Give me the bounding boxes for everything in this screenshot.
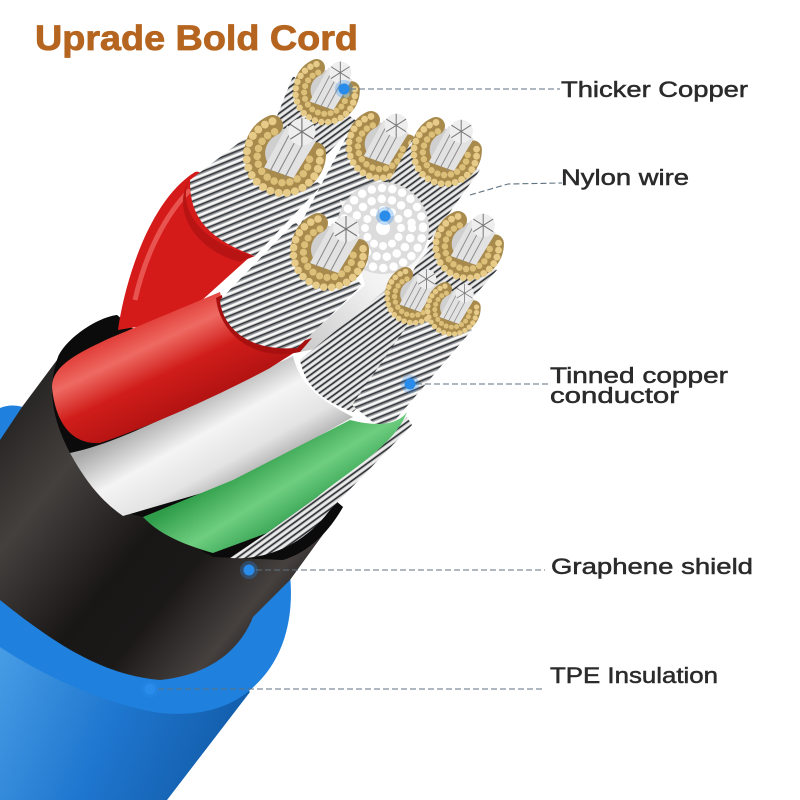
strand: left xyxy=(183,118,322,262)
back red wire xyxy=(118,172,252,330)
callout: nylon wire: Nylon wire xyxy=(561,165,689,190)
green wire xyxy=(143,412,407,553)
back red wire highlight xyxy=(135,190,190,300)
white wire xyxy=(70,356,353,516)
callout: tinned copper conductor xyxy=(401,363,728,408)
red wire front xyxy=(52,292,312,443)
strand: centre back xyxy=(300,114,412,225)
callout: graphene shield xyxy=(240,554,753,579)
callout: TPE insulation xyxy=(141,663,718,698)
callout: thicker copper xyxy=(335,77,748,102)
callout: thicker copper: Thicker Copper xyxy=(561,77,748,102)
blue TPE insulation xyxy=(0,406,291,800)
callout: nylon wire xyxy=(376,165,689,225)
callout: tinned copper conductor: Tinned copper xyxy=(550,363,728,388)
strand: right back xyxy=(365,120,480,240)
strand: lower xyxy=(300,269,477,432)
graphene shield xyxy=(0,315,343,680)
strand: front left xyxy=(220,216,363,348)
callout: graphene shield: Graphene shield xyxy=(551,554,753,579)
lowest silver strand xyxy=(230,417,412,558)
sheath opening shadow xyxy=(52,315,343,560)
strand: upper back xyxy=(273,62,358,172)
title: Uprade Bold Cord xyxy=(35,19,358,58)
cable illustration xyxy=(0,62,499,800)
callout: TPE insulation: TPE Insulation xyxy=(550,663,718,688)
nylon wire xyxy=(300,182,430,352)
callout: tinned copper conductor: conductor xyxy=(550,383,679,408)
strand: right middle xyxy=(395,214,499,335)
